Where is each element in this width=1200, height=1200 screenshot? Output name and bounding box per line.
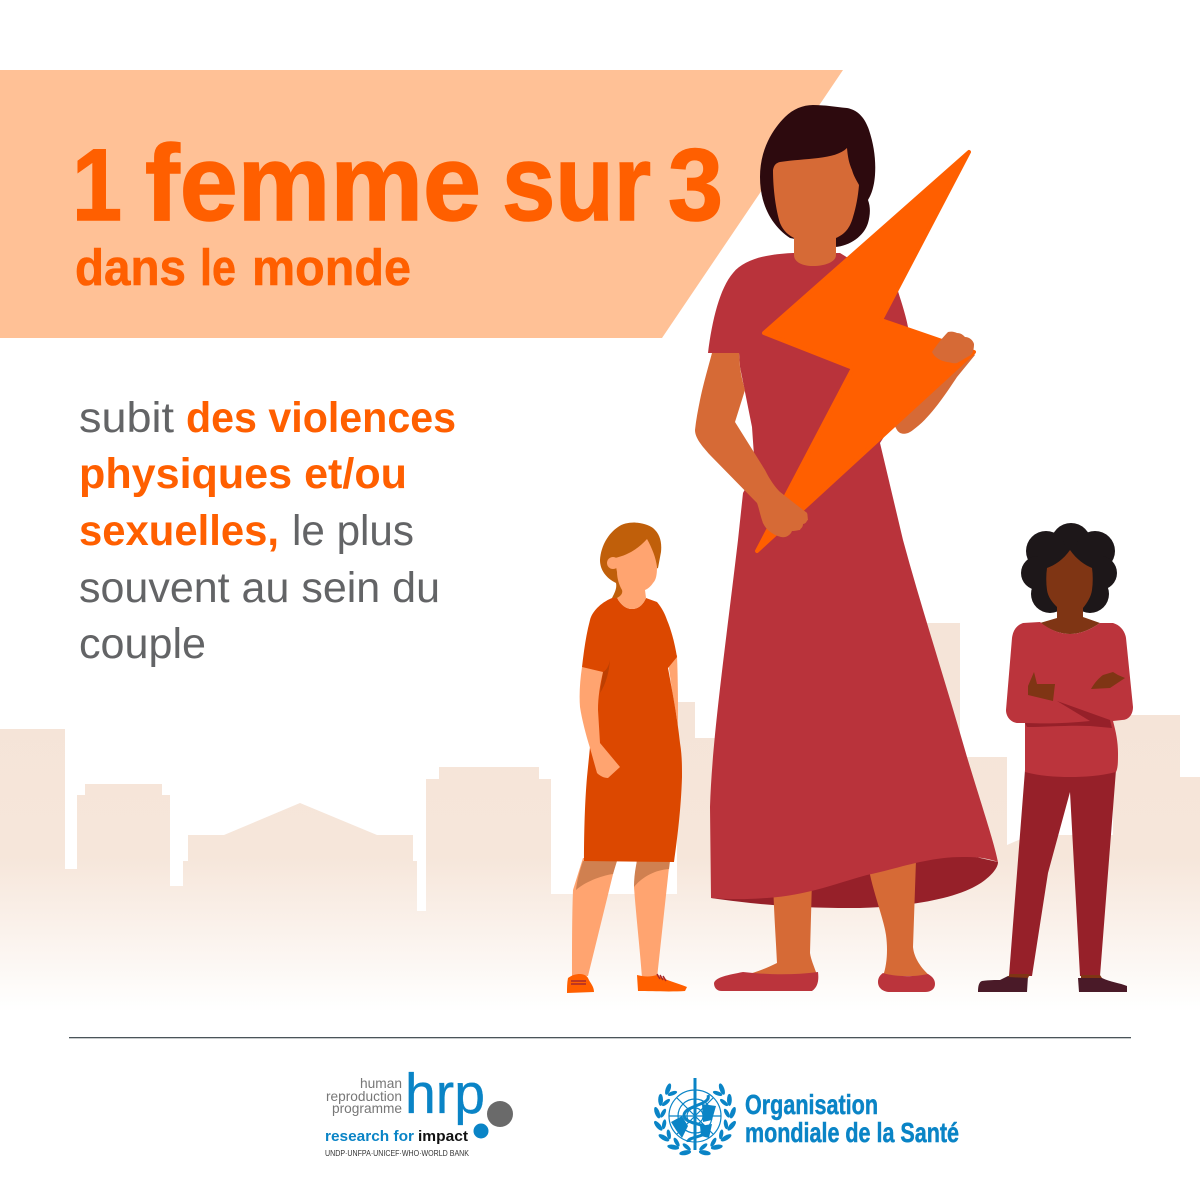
WHO wordmark: Organisation — [745, 1089, 878, 1120]
near arm — [580, 667, 620, 778]
hand on bolt right — [932, 332, 974, 363]
body text: sexuelles, — [79, 507, 279, 555]
central woman holding lightning bolt — [695, 105, 998, 992]
body text: le plus — [292, 507, 414, 555]
title: 1 femme sur 3: 1 — [72, 128, 122, 242]
trousers — [1009, 770, 1116, 976]
face and neck — [1040, 550, 1100, 634]
legs — [572, 858, 670, 978]
WHO wordmark — [745, 1089, 959, 1148]
programme name — [326, 1075, 402, 1116]
sweater — [1006, 622, 1133, 777]
woman with crossed arms — [978, 523, 1133, 992]
under skirt — [711, 840, 998, 908]
afro hair — [1021, 523, 1117, 613]
sleeve folds — [1025, 701, 1112, 728]
hand on bolt bottom — [757, 488, 808, 537]
body text — [79, 394, 456, 668]
legs — [745, 860, 930, 976]
divider rule — [69, 1037, 1131, 1038]
girl in orange dress — [567, 523, 687, 993]
programme name: human — [360, 1075, 402, 1091]
logo: WHO emblem — [653, 1078, 737, 1156]
title: 1 femme sur 3: femme — [145, 122, 481, 243]
orange dress — [582, 598, 682, 862]
programme name: reproduction — [326, 1088, 402, 1104]
subtitle: dans le monde: dans — [75, 239, 186, 296]
blue dot — [474, 1124, 488, 1138]
body text: souvent au sein du — [79, 564, 440, 612]
red dress — [708, 253, 998, 899]
body text: couple — [79, 620, 206, 668]
subtitle: dans le monde — [75, 239, 411, 296]
logo: human reproduction programme — [325, 1062, 513, 1158]
hair — [600, 523, 661, 600]
programme name: programme — [332, 1100, 402, 1116]
shoes — [978, 976, 1127, 992]
grey dot — [487, 1101, 513, 1127]
logo: human reproduction programme: impact — [418, 1128, 468, 1145]
sleeve shadow — [600, 660, 610, 693]
staff and serpent — [694, 1078, 696, 1150]
right laurel — [698, 1083, 737, 1156]
body text: subit — [79, 394, 174, 442]
subtitle: dans le monde: monde — [252, 239, 411, 296]
title: 1 femme sur 3 — [72, 122, 723, 243]
face and neck — [773, 148, 859, 266]
partners: UNDP·UNFPA·UNICEF·WHO·WORLD BANK — [325, 1149, 470, 1158]
ear — [607, 557, 619, 569]
tagline: research for — [325, 1128, 414, 1145]
hrp letters: hrp — [405, 1062, 485, 1126]
title: 1 femme sur 3: sur — [502, 122, 651, 243]
far arm — [880, 340, 975, 434]
hair — [760, 105, 875, 247]
subtitle: dans le monde: le — [200, 239, 236, 296]
background city skyline — [0, 623, 1200, 1012]
far arm — [668, 655, 678, 725]
WHO wordmark: mondiale de la Santé — [745, 1117, 959, 1148]
title: 1 femme sur 3: 3 — [668, 128, 723, 242]
globe grid — [669, 1090, 721, 1142]
knee shadows — [576, 861, 670, 890]
continents — [671, 1104, 716, 1138]
body text: des violences — [186, 394, 456, 442]
left laurel — [653, 1083, 692, 1156]
body text: physiques et/ou — [79, 450, 407, 498]
near arm — [695, 353, 808, 537]
shoes — [714, 972, 935, 992]
headline banner — [0, 70, 843, 338]
shoe laces — [571, 974, 666, 984]
shoes — [567, 974, 687, 993]
hands — [1028, 672, 1125, 701]
lightning bolt — [757, 152, 974, 551]
face and neck — [615, 539, 657, 609]
